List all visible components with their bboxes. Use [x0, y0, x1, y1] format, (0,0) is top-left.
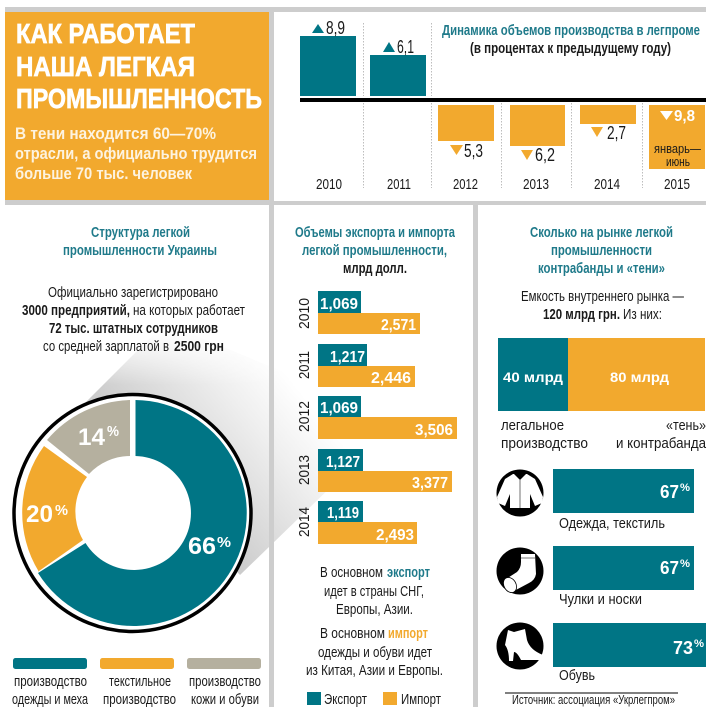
bars 2014: 2014 — [296, 507, 313, 537]
bar 2013 — [510, 105, 565, 165]
heading: Объемы экспорта и импорта — [295, 225, 456, 241]
text block: export destinations — [320, 565, 430, 618]
year labels: 2011 — [387, 176, 411, 193]
title: НАША ЛЕГКАЯ — [16, 51, 195, 82]
subtitle: отрасли, а официально трудится — [15, 145, 257, 163]
title: КАК РАБОТАЕТ — [16, 18, 195, 49]
bar 2014 — [580, 105, 636, 143]
text block: import origins — [306, 626, 443, 679]
bars 2012 — [296, 396, 457, 439]
heading: промышленности — [551, 243, 652, 259]
bar 2010: 8,9 — [326, 18, 345, 38]
row: clothing: 67 — [660, 482, 679, 502]
title: ПРОМЫШЛЕННОСТЬ — [16, 83, 262, 114]
axis line — [300, 98, 706, 102]
bars 2014: 2,493 — [376, 527, 414, 544]
year labels: 2012 — [453, 176, 478, 193]
bars 2012: 3,506 — [415, 422, 453, 439]
row: clothing — [496, 469, 694, 532]
bar 2015: 9,8 — [674, 108, 695, 125]
bars 2010: 1,069 — [320, 296, 358, 313]
text block: registered enterprises: со средней зарплатой в — [43, 339, 169, 355]
bar 2011 — [370, 37, 426, 96]
bars 2012: 2012 — [296, 401, 313, 432]
heading: Структура легкой — [91, 225, 190, 241]
bars 2014: 1,119 — [327, 505, 359, 522]
title — [16, 18, 262, 114]
text block: market capacity — [521, 289, 684, 323]
legend: leather and footwear: производство — [189, 674, 261, 690]
segment: textile 20% — [22, 446, 87, 572]
bar 2014: 2,7 — [607, 123, 626, 143]
panel: structure of light industry — [12, 225, 261, 708]
text block: market capacity: Из них: — [623, 307, 662, 323]
legend: clothing and fur — [12, 658, 89, 708]
value 20% — [26, 501, 68, 528]
text block: registered enterprises: на которых работает — [133, 303, 245, 319]
stacked bar: market split — [498, 338, 705, 411]
bars 2013: 2013 — [296, 455, 313, 485]
legend: export and import: Импорт — [401, 692, 441, 708]
text block: registered enterprises: 3000 предприятий, — [22, 303, 130, 319]
text block: export destinations: Европы, Азии. — [336, 602, 413, 618]
subtitle — [15, 125, 257, 183]
panel: export and import — [295, 225, 457, 708]
heading — [530, 225, 673, 277]
subtitle: В тени находится 60—70% — [15, 125, 216, 143]
bars 2010: 2,571 — [381, 317, 416, 334]
bars 2011 — [296, 344, 415, 387]
heading — [295, 225, 456, 277]
text block: import origins: импорт — [388, 626, 428, 642]
text block: registered enterprises: Официально зарегистрировано — [48, 285, 218, 301]
legend: textile — [100, 658, 176, 708]
bars 2011: 2,446 — [371, 370, 411, 387]
segment: leather and footwear 14% — [47, 400, 130, 474]
bars 2013: 1,127 — [326, 454, 360, 471]
text block: export destinations: экспорт — [387, 565, 430, 581]
legend: export and import — [307, 692, 441, 708]
value 66%: % — [217, 534, 231, 551]
bar 2015 — [649, 105, 705, 169]
legend: textile: текстильное — [109, 674, 171, 690]
heading: легкой промышленности, — [302, 243, 447, 259]
row: footwear: Обувь — [559, 668, 595, 684]
text block: import origins: одежды и обуви идет — [318, 645, 432, 661]
bars 2010: 2010 — [296, 298, 313, 329]
value 66% — [188, 533, 231, 560]
bars 2013 — [296, 449, 452, 492]
bar 2013: 6,2 — [535, 145, 555, 165]
bar 2012: 5,3 — [464, 141, 483, 161]
bar 2015: январь— — [654, 141, 701, 156]
value 20%: % — [55, 502, 68, 519]
legend: leather and footwear — [187, 658, 261, 708]
bars 2013: 3,377 — [412, 475, 448, 492]
heading — [63, 225, 217, 259]
label: legal production: производство — [501, 436, 588, 452]
panel: production dynamics chart — [300, 18, 706, 193]
row: clothing: % — [680, 482, 690, 494]
subtitle: больше 70 тыс. человек — [15, 165, 193, 183]
year labels: 2015 — [664, 176, 690, 193]
value 14% — [78, 423, 119, 451]
value 66%: 66 — [188, 533, 216, 560]
icon: sock — [496, 548, 544, 595]
heading: млрд долл. — [343, 261, 407, 277]
row: footwear: % — [694, 638, 704, 650]
legend: leather and footwear: кожи и обуви — [191, 692, 259, 708]
icon: shirt — [496, 470, 544, 516]
legend: clothing and fur: одежды и меха — [12, 692, 89, 708]
icon: boot — [496, 622, 544, 670]
value 14%: 14 — [78, 424, 106, 451]
text block: registered enterprises: 72 тыс. штатных сотрудников — [49, 321, 218, 337]
year labels — [316, 176, 690, 193]
stacked bar: market split: 40 млрд — [503, 369, 563, 385]
donut long shadow — [80, 320, 410, 575]
bars 2014 — [296, 501, 417, 544]
row: socks: % — [680, 558, 690, 570]
row: clothing: Одежда, текстиль — [559, 516, 665, 532]
value 14%: % — [107, 423, 119, 440]
row: footwear — [496, 622, 706, 684]
text block: market capacity: 120 млрд грн. — [543, 307, 620, 323]
bar 2012 — [438, 105, 494, 161]
segment: clothing and fur 66% — [38, 400, 247, 626]
panel: title block — [5, 12, 269, 200]
year labels: 2014 — [594, 176, 620, 193]
legend: textile: производство — [103, 692, 176, 708]
heading: Сколько на рынке легкой — [530, 225, 673, 241]
legend: export and import: Экспорт — [324, 692, 367, 708]
value 20%: 20 — [26, 501, 53, 528]
text block: registered enterprises — [22, 285, 245, 355]
row: socks: 67 — [660, 558, 679, 578]
bar 2015: июнь — [666, 154, 690, 169]
text block: registered enterprises: 2500 грн — [174, 339, 224, 355]
year labels: 2010 — [316, 176, 342, 193]
text block: import origins: из Китая, Азии и Европы. — [306, 663, 443, 679]
row: footwear: 73 — [673, 638, 693, 658]
donut chart — [14, 394, 251, 632]
heading: промышленности Украины — [63, 243, 217, 259]
bars 2011: 2011 — [296, 351, 313, 379]
label: legal production — [501, 418, 588, 452]
bars 2010 — [296, 291, 420, 334]
label: shadow and contraband — [616, 418, 707, 452]
label: legal production: легальное — [501, 418, 564, 434]
panel: contraband and shadow market — [496, 225, 707, 707]
text block: import origins: В основном — [320, 626, 385, 642]
year labels: 2013 — [523, 176, 549, 193]
text block: export destinations: идет в страны СНГ, — [324, 584, 424, 600]
legend: clothing and fur: производство — [14, 674, 87, 690]
chart heading — [442, 23, 700, 57]
label: shadow and contraband: «тень» — [666, 418, 706, 434]
bar 2010 — [300, 18, 356, 96]
bar 2011: 6,1 — [397, 37, 414, 57]
bars 2012: 1,069 — [320, 400, 358, 417]
text block: export destinations: В основном — [320, 565, 383, 581]
row: socks: Чулки и носки — [559, 592, 642, 608]
heading: контрабанды и «тени» — [538, 261, 665, 277]
stacked bar: market split: 80 млрд — [610, 369, 669, 385]
row: socks — [496, 546, 694, 608]
bars 2011: 1,217 — [330, 349, 365, 366]
